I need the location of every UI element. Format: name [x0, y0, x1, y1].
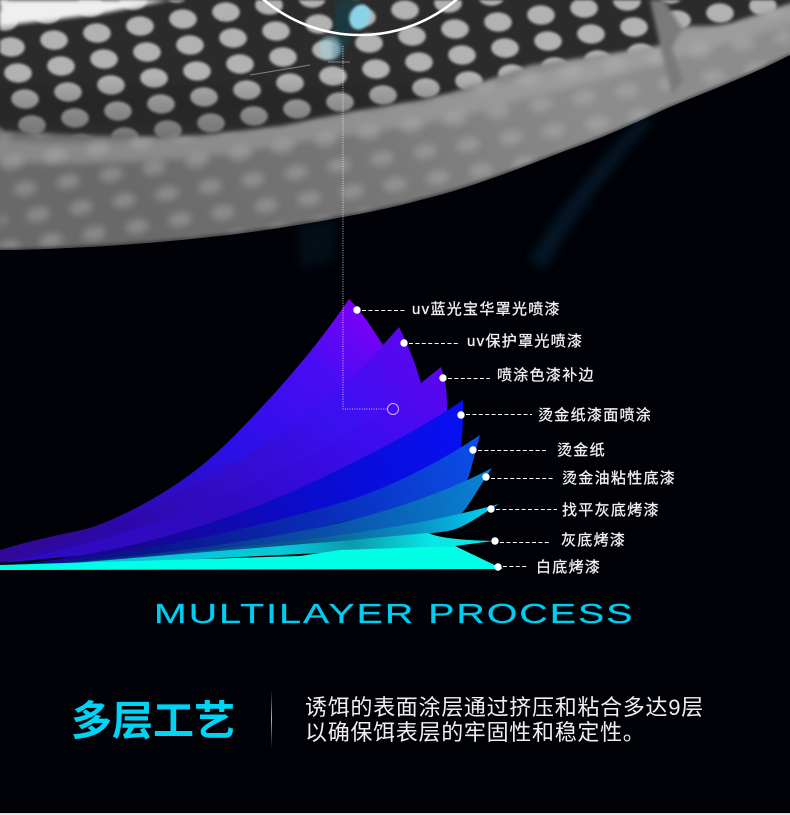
layer 2: uv protective gloss	[0, 327, 421, 562]
description	[305, 695, 704, 745]
white circle callout arc	[211, 0, 509, 35]
layer labels: 烫金纸	[557, 442, 606, 459]
layer labels: 烫金纸漆面喷涂	[538, 407, 652, 424]
teal reflection	[319, 0, 374, 60]
layer 5: hot-stamping foil	[0, 435, 480, 567]
layer 8: grey base bake	[0, 533, 493, 569]
layer labels: 烫金油粘性底漆	[562, 470, 676, 487]
layer labels	[412, 301, 676, 576]
dotted pointer from circle to diagram	[343, 46, 398, 414]
layer labels: 喷涂色漆补边	[497, 367, 595, 384]
layer 3: spray colour edge	[0, 367, 447, 563]
layer 7: levelling grey base	[0, 504, 499, 569]
scratch marks	[220, 20, 350, 76]
layer 1: uv blue gem gloss	[0, 299, 383, 562]
dark rim shading	[0, 55, 790, 250]
layer 4: foil lacquer spray	[0, 400, 463, 566]
layer labels: 灰底烤漆	[561, 532, 626, 549]
layer 6: foil adhesive base	[0, 468, 492, 568]
layer 9: white base bake	[0, 546, 503, 570]
english title: MULTILAYER PROCESS	[154, 598, 635, 630]
vertical divider	[271, 690, 272, 748]
structural strut top right	[650, 0, 684, 95]
layer labels: uv保护罩光喷漆	[467, 333, 583, 350]
description: 以确保饵表层的牢固性和稳定性。	[305, 720, 646, 745]
bright band below the mesh	[0, 10, 790, 153]
layer labels: 找平灰底烤漆	[562, 502, 660, 519]
chinese heading: 多层工艺	[71, 698, 235, 744]
layered fan diagram	[0, 299, 503, 570]
layer labels: 白底烤漆	[536, 559, 601, 576]
dark mesh scales	[0, 0, 790, 150]
description: 诱饵的表面涂层通过挤压和粘合多达9层	[305, 695, 704, 720]
photo: close-up of lure surface	[0, 0, 790, 250]
leader lines and dots	[353, 306, 557, 571]
layer labels: uv蓝光宝华罩光喷漆	[412, 301, 561, 318]
bright highlight top left	[0, 0, 170, 26]
